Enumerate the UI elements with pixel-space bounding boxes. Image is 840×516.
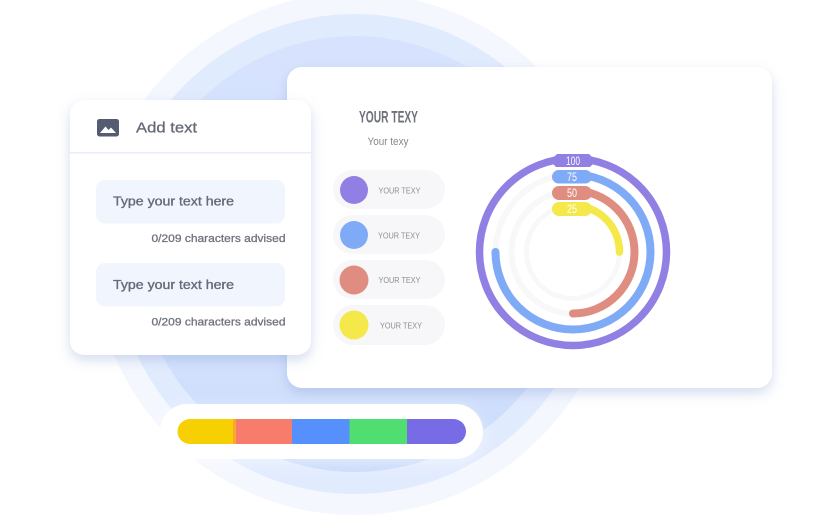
colour palette bar [178, 419, 466, 444]
legend item: blue: YOUR TEXY [378, 230, 420, 240]
character count 2: 0/209 characters advised [152, 316, 286, 328]
label 25 [552, 202, 592, 216]
legend item: red [333, 260, 445, 299]
legend item: blue [333, 215, 445, 254]
ring: 100 [480, 158, 666, 346]
label 50: 50 [567, 188, 577, 200]
colour palette pill [160, 404, 483, 459]
input field 2 [96, 263, 285, 306]
legend item: purple: YOUR TEXY [378, 186, 421, 196]
character count 1: 0/209 characters advised [152, 233, 286, 245]
label 75: 75 [567, 172, 577, 184]
background concentric circles [94, 0, 616, 515]
card heading: Add text [136, 120, 197, 136]
label 25: 25 [567, 204, 577, 216]
icon: image [97, 119, 119, 136]
label 50 [552, 186, 592, 200]
label 75 [552, 170, 592, 184]
legend list [333, 170, 445, 345]
input field 1: Type your text here [113, 194, 234, 208]
panel: add text card [70, 100, 311, 355]
chart card heading: YOUR TEXY [359, 108, 418, 126]
legend item: red: YOUR TEXY [378, 275, 421, 285]
radial progress chart [480, 158, 666, 346]
ring: 50 [573, 190, 634, 314]
legend item: yellow [333, 305, 445, 345]
label 100: 100 [566, 156, 580, 168]
ring: 75 [496, 174, 651, 329]
input field 2: Type your text here [113, 277, 234, 292]
legend item: purple [333, 170, 445, 209]
label 100 [552, 154, 594, 168]
panel: chart card [287, 67, 772, 388]
legend item: yellow: YOUR TEXY [380, 320, 422, 330]
chart card subheading: Your texy [368, 136, 409, 148]
ring: 25 [573, 206, 620, 252]
input field 1 [96, 180, 285, 224]
